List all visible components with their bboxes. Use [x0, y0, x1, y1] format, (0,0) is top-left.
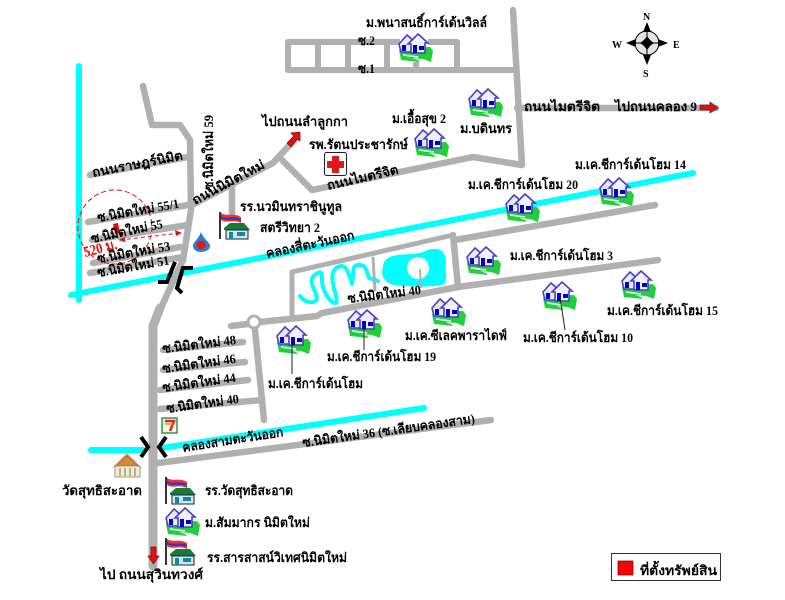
property location marker: 520 ม. [82, 237, 119, 261]
labels: ม.เค.ชีการ์เด้นโฮม 14 [575, 156, 686, 172]
labels: ม.เค.ชีการ์เด้นโฮม 20 [468, 176, 578, 192]
compass: W [612, 40, 622, 51]
icon: temple [112, 453, 142, 477]
labels: ม.เค.ชีการ์เด้นโฮม 10 [523, 329, 633, 345]
labels: ม.เค.ชีการ์เด้นโฮม 19 [327, 348, 436, 364]
compass [612, 12, 680, 80]
labels: ซ.นิมิตใหม่ 59 [200, 115, 216, 190]
labels: ม.บดินทร [460, 121, 512, 136]
labels: ม.เค.ชีการ์เด้นโฮม [268, 375, 363, 391]
labels: ซ.นิมิตใหม่ 36 (ซ.เลียบคลองสาม) [301, 410, 476, 450]
labels: ซ.นิมิตใหม่ 40 [165, 390, 240, 416]
labels: ไป ถนนสุวินทวงศ์ [98, 566, 204, 583]
icon: PTT station [193, 232, 210, 252]
bridge upper [158, 262, 193, 293]
labels: ซ.นิมิตใหม่ 46 [161, 350, 237, 376]
arrow: to Khlong 9 [700, 102, 718, 113]
arrow: to Lam Luk Ka [287, 132, 300, 147]
labels: รพ.รัตนประชารักษ์ [309, 137, 408, 152]
labels: ซ.นิมิตใหม่ 51 [96, 252, 170, 280]
bridge lower [141, 437, 166, 457]
labels: สตรีวิทยา 2 [260, 220, 320, 235]
labels: ถนนนิมิตใหม่ [189, 156, 267, 208]
icon: 7-eleven [162, 418, 177, 433]
legend [612, 554, 720, 580]
school icons [165, 212, 250, 565]
labels: คลองสี่ตะวันออก [264, 226, 356, 261]
house icons [166, 34, 656, 536]
labels: ม.เค.ชีการ์เด้นโฮม 15 [607, 302, 718, 318]
labels: ซ.นิมิตใหม่ 55/1 [96, 195, 180, 225]
labels: ม.เอื้อสุข 2 [392, 108, 446, 127]
labels: ม.เค.ซีเลคพาราไดฟ์ [405, 327, 507, 343]
labels: ม.สัมมากร นิมิตใหม่ [205, 514, 310, 530]
labels: วัดสุทธิสะอาด [62, 483, 142, 499]
compass: N [643, 12, 651, 23]
compass: E [673, 40, 680, 51]
labels: รร.วัดสุทธิสะอาด [205, 483, 293, 499]
legend: ที่ตั้งทรัพย์สิน [640, 560, 717, 578]
labels [62, 12, 718, 583]
labels: ซ.2 [358, 33, 375, 48]
labels: ถนนไมตรีจิต [325, 161, 400, 193]
labels: รร.นวมินทราชินูทูล [240, 199, 342, 215]
labels: รร.สารสาสน์วิเทศนิมิตใหม่ [207, 549, 347, 565]
leader lines [292, 297, 565, 374]
labels: ไปถนนลำลูกกา [260, 113, 348, 130]
labels: ม.พนาสนธิ์การ์เด้นวิลล์ [366, 12, 487, 30]
labels: ซ.1 [358, 61, 375, 76]
road network [88, 10, 716, 566]
canals [71, 66, 693, 450]
labels: ซ.นิมิตใหม่ 44 [161, 369, 237, 395]
labels: คลองสามตะวันออก [181, 424, 284, 455]
labels: ม.เค.ชีการ์เด้นโฮม 3 [510, 247, 613, 263]
labels: ซ.นิมิตใหม่ 40 [346, 281, 422, 306]
labels: ถนนไมตรีจิต [524, 98, 600, 114]
labels: ซ.นิมิตใหม่ 53 [96, 237, 172, 266]
labels: ซ.นิมิตใหม่ 55 [89, 215, 164, 246]
labels: ซ.นิมิตใหม่ 48 [161, 331, 237, 356]
arrow: to Suwinthawong [148, 547, 159, 564]
labels: ไปถนนคลอง 9 [613, 98, 697, 114]
property location marker [78, 190, 182, 264]
compass: S [643, 69, 649, 80]
labels: ถนนราษฎร์นิมิต [91, 148, 184, 181]
icon: hospital [324, 152, 346, 176]
